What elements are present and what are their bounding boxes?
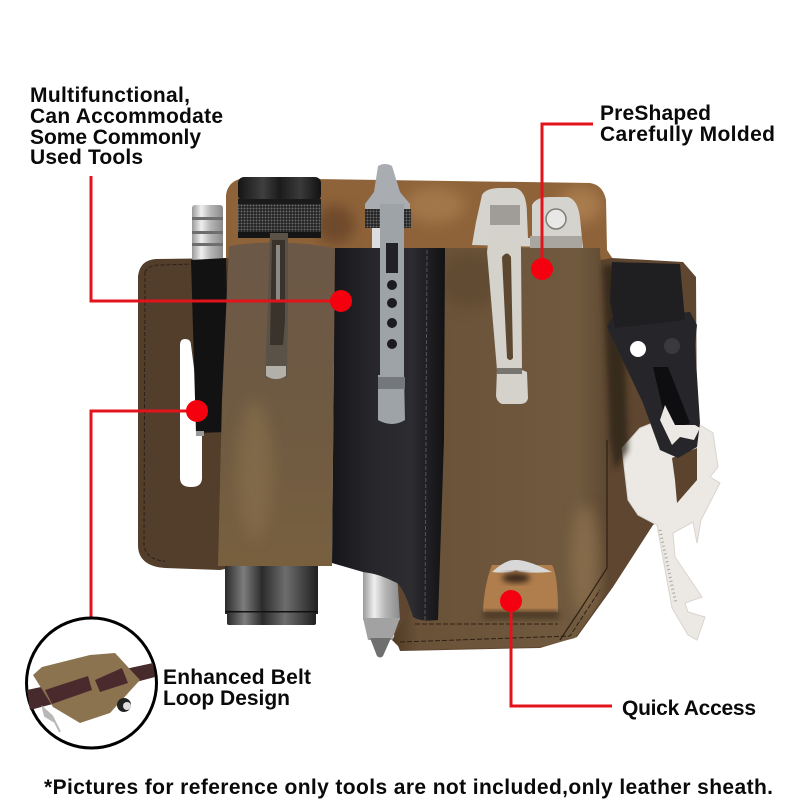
callout: preshaped leader	[531, 124, 593, 280]
flashlight tail	[225, 563, 318, 625]
text: multifunctional: Some Commonly	[30, 126, 201, 149]
text: multifunctional: Multifunctional,	[30, 84, 190, 107]
leather seen through card	[672, 448, 697, 503]
callout: belt loop leader	[91, 400, 208, 620]
right belt panel	[392, 258, 697, 651]
flashlight pouch	[218, 233, 335, 566]
left belt panel	[138, 258, 240, 570]
quick access opening	[483, 565, 558, 612]
text: enhanced belt loop design: Loop Design	[163, 687, 290, 710]
text: quick access: Quick Access	[622, 697, 756, 720]
black pen pouch	[332, 248, 445, 621]
text: multifunctional: Can Accommodate	[30, 105, 223, 128]
text: multifunctional	[30, 84, 223, 169]
black strap and carabiner	[607, 262, 700, 458]
callout lines and dots	[91, 124, 612, 706]
belt slot	[180, 339, 202, 487]
pen head and clip	[365, 164, 411, 424]
footer note: *Pictures for reference only tools are not included,only leather sheath.	[44, 776, 773, 799]
small black pen	[191, 205, 228, 436]
back panel: tan leather	[226, 179, 612, 362]
product photo: leather sheath with tools	[138, 164, 720, 658]
callout: quick access leader	[500, 590, 612, 706]
stitching	[560, 440, 607, 640]
pen tip	[363, 572, 400, 658]
side shadow beside right pouch	[603, 265, 628, 470]
text: multifunctional: Used Tools	[30, 146, 143, 169]
flashlight clip	[265, 233, 288, 378]
multi-tool card	[622, 420, 720, 640]
text: enhanced belt loop design	[163, 666, 311, 710]
inset circle: belt loop photo	[26, 618, 156, 748]
text: enhanced belt loop design: Enhanced Belt	[163, 666, 311, 689]
right pouch with opening	[392, 248, 612, 650]
text: preshaped: PreShaped	[600, 102, 711, 125]
callout: multifunctional leader	[91, 176, 352, 312]
text: preshaped: Carefully Molded	[600, 123, 775, 146]
flashlight head	[238, 177, 321, 238]
text: preshaped	[600, 102, 775, 146]
folding multi-tool and clip	[472, 188, 583, 404]
